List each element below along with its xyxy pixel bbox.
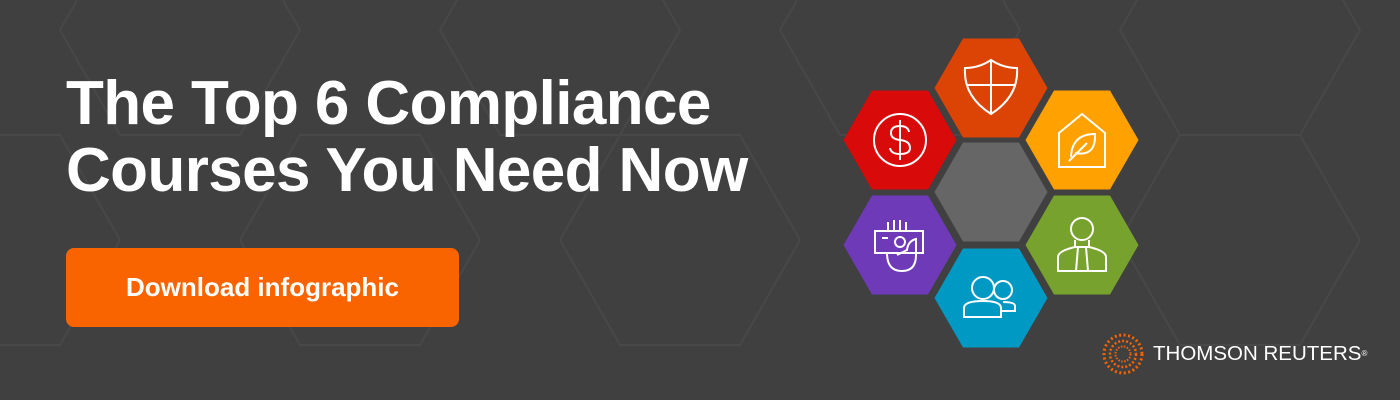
logo text: THOMSON REUTERS®: [1153, 342, 1367, 365]
hex: eco house: [1026, 90, 1138, 190]
title: Courses You Need Now: [66, 136, 748, 205]
center hex: [934, 142, 1048, 242]
hex: businessman: [1026, 196, 1138, 294]
logo: thomson reuters: [1102, 334, 1368, 374]
hex: dollar: [844, 90, 956, 190]
icon: dotted sphere: [1102, 334, 1144, 374]
title: The Top 6 Compliance: [66, 69, 711, 138]
hex: hand with money: [844, 196, 956, 294]
hex: people: [934, 248, 1048, 348]
button: download: Download infographic: [126, 272, 399, 302]
button: download: [66, 248, 459, 327]
title: [66, 69, 748, 205]
hex: shield: [934, 38, 1048, 138]
